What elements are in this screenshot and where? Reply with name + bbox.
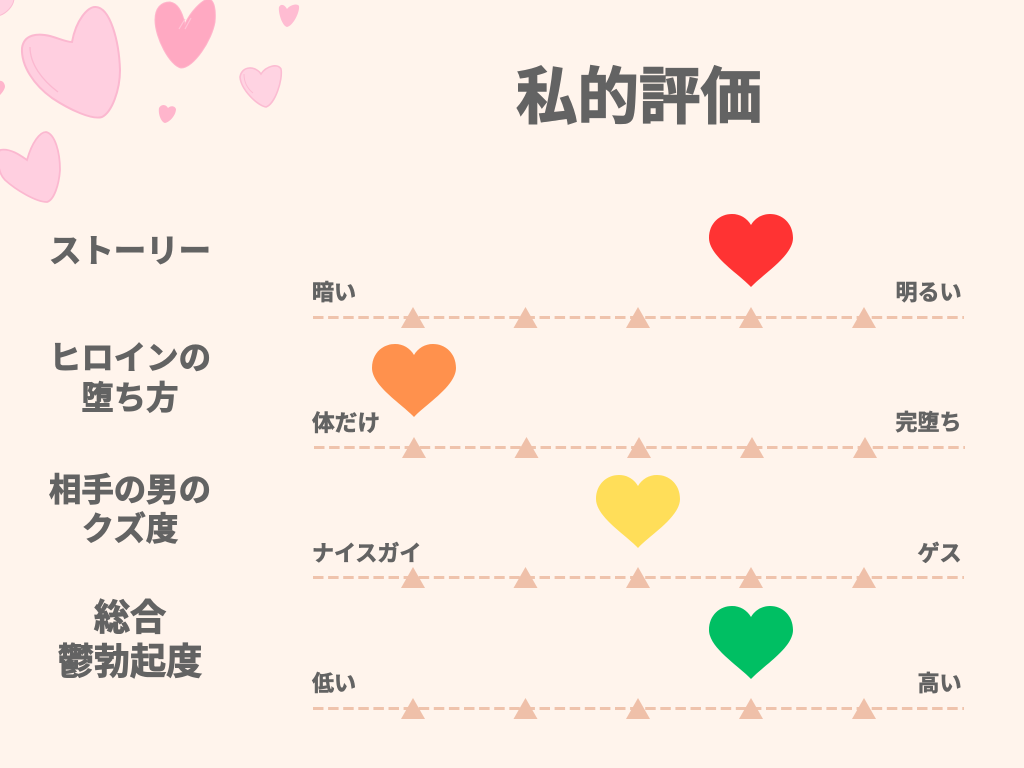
category label: heroine — [49, 340, 211, 416]
scale: overall — [313, 698, 964, 719]
category label: guy — [49, 472, 211, 547]
category label: guy: 相手の男の — [49, 472, 211, 508]
category label: overall — [58, 597, 202, 682]
scale label: nice guy: ナイスガイ — [312, 541, 421, 566]
category label: story: ストーリー — [49, 233, 211, 269]
scale label: fully fallen: 完堕ち — [895, 410, 962, 435]
category label: overall: 総合 — [94, 597, 166, 638]
category label: overall: 鬱勃起度 — [58, 641, 202, 682]
title: 私的評価 — [516, 63, 762, 132]
icon: lower-left heart — [0, 132, 60, 202]
icon: cropped left-edge heart — [0, 81, 5, 96]
scale label: low: 低い — [312, 671, 356, 696]
category label: heroine: ヒロインの — [49, 340, 211, 376]
scale label: dark: 暗い — [312, 280, 356, 305]
icon: small top-right heart — [279, 5, 299, 27]
scale: guy — [313, 567, 964, 588]
icon: cropped top-left heart — [0, 0, 14, 16]
scale: story — [313, 307, 964, 328]
scale label: scum: ゲス — [917, 541, 962, 566]
icon: orange heart marker — [372, 344, 456, 417]
scale label: body only: 体だけ — [312, 410, 380, 436]
scale label: bright: 明るい — [895, 280, 962, 305]
icon: bright pink heart — [155, 0, 215, 68]
category label: guy: クズ度 — [82, 511, 178, 547]
scale: heroine — [314, 437, 965, 458]
icon: green heart marker — [709, 606, 793, 679]
category label: heroine: 堕ち方 — [81, 380, 179, 416]
icon: medium pale heart — [240, 66, 281, 107]
scale label: high: 高い — [917, 671, 962, 696]
icon: yellow heart marker — [596, 475, 680, 548]
icon: red heart marker — [709, 214, 793, 287]
icon: tiny heart — [159, 105, 176, 123]
icon: large pink heart — [22, 7, 120, 118]
